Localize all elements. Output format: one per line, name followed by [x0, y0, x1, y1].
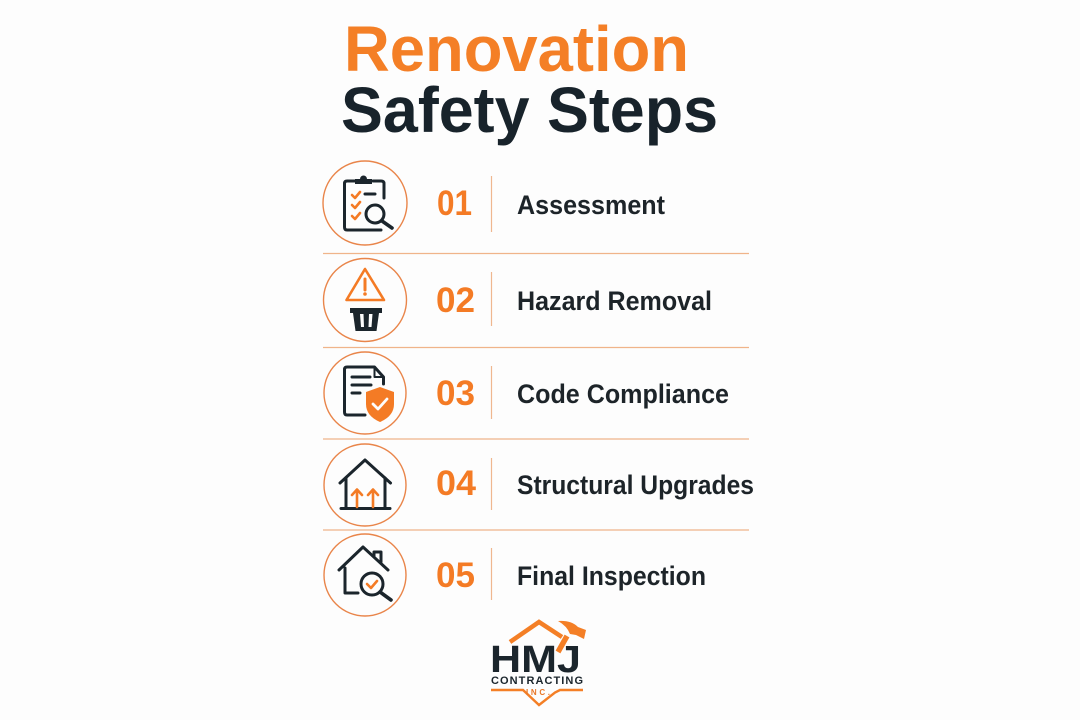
step 02: Hazard Removal: [324, 258, 712, 342]
number 02: 02: [436, 281, 475, 320]
icon: house with magnifier and check: [324, 534, 406, 616]
logo: HMJ Contracting Inc.: [490, 621, 586, 705]
label Hazard Removal: Hazard Removal: [517, 286, 712, 316]
icon: document with shield: [324, 352, 406, 434]
icon: house with up arrows: [324, 444, 406, 526]
label Assessment: Assessment: [517, 190, 665, 220]
logo icon: roof and hammer: [510, 621, 586, 652]
number 03: 03: [436, 374, 475, 413]
label Structural Upgrades: Structural Upgrades: [517, 470, 754, 500]
logo wordmark HMJ: HMJ: [490, 639, 581, 681]
icon: warning triangle over bin: [324, 258, 406, 342]
logo text INC.: INC.: [526, 688, 550, 697]
number 05: 05: [436, 556, 475, 595]
step 01: Assessment: [323, 161, 665, 245]
logo text CONTRACTING: CONTRACTING: [491, 675, 583, 687]
title line: Safety Steps: Safety Steps: [341, 74, 718, 146]
step 04: Structural Upgrades: [324, 444, 754, 526]
title line: Renovation: Renovation: [344, 13, 689, 85]
label Final Inspection: Final Inspection: [517, 561, 706, 591]
number 01: 01: [437, 184, 472, 223]
title: [341, 13, 718, 146]
step 05: Final Inspection: [324, 534, 706, 616]
logo bottom chevron: [491, 690, 583, 705]
label Code Compliance: Code Compliance: [517, 379, 729, 409]
icon: clipboard with magnifier: [323, 161, 407, 245]
step 03: Code Compliance: [324, 352, 729, 434]
number 04: 04: [436, 464, 477, 503]
